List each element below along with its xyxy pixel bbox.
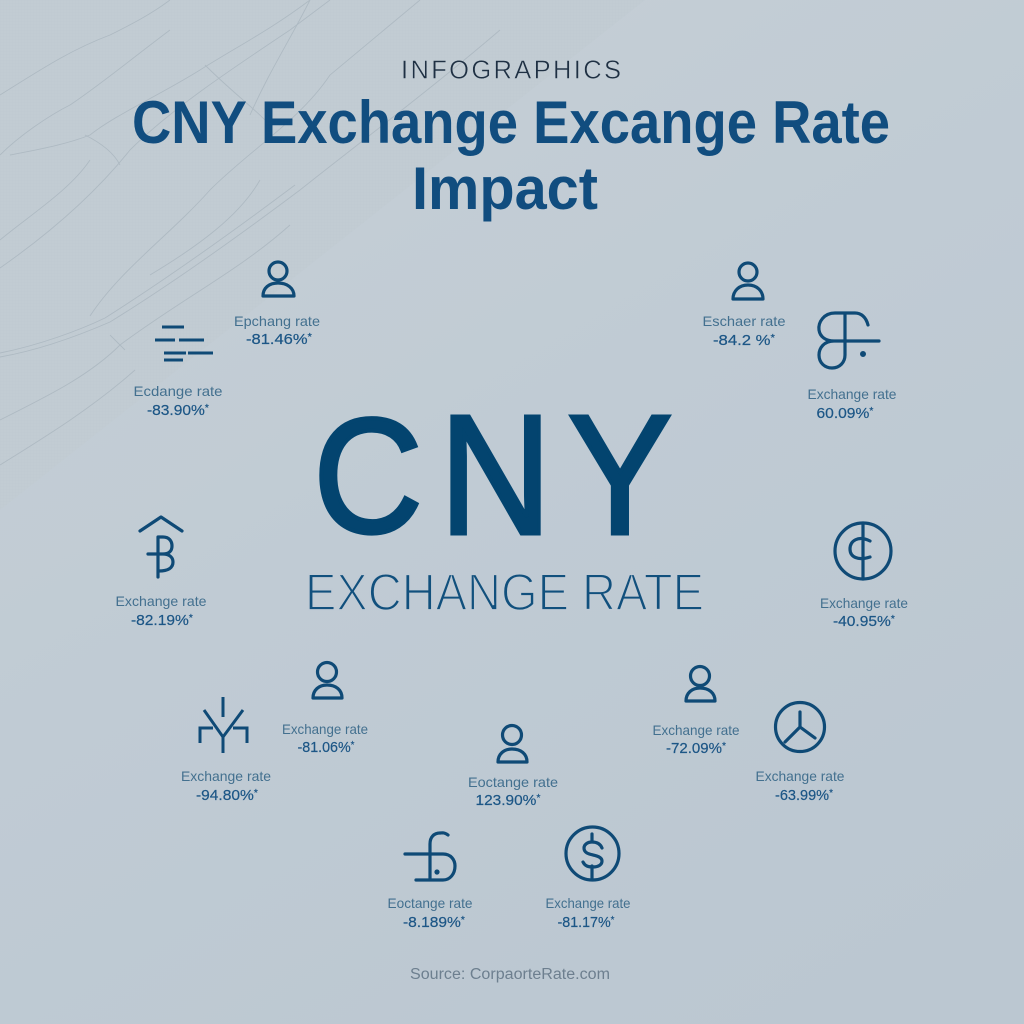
label: Eschaer rate xyxy=(702,313,786,329)
value: * xyxy=(254,788,258,799)
label: Ecdange rate xyxy=(134,383,223,399)
value: * xyxy=(891,614,895,625)
label: Exchange rate xyxy=(116,593,207,609)
value: * xyxy=(461,915,465,926)
value: 123.90% xyxy=(476,793,533,809)
label: Exchange rate xyxy=(181,768,271,784)
icon: cent coin xyxy=(835,523,891,579)
value: * xyxy=(869,406,874,417)
icon: caret and B glyph xyxy=(140,517,182,577)
item: bottom dollar coin xyxy=(546,827,631,931)
item: lower left person xyxy=(282,662,368,756)
icon: person xyxy=(733,263,763,299)
item: right cent coin xyxy=(820,523,908,630)
icon: looped currency glyph xyxy=(819,313,879,368)
value: -83.90% xyxy=(147,403,201,419)
item: bottom left script f xyxy=(388,833,473,931)
source line: Source: CorpaorteRate.com xyxy=(410,966,610,983)
value: -63.99% xyxy=(775,788,829,804)
item: top left person xyxy=(234,262,320,348)
label: Exchange rate xyxy=(756,768,845,784)
central CNY wordmark xyxy=(314,380,672,570)
icon: branching glyph xyxy=(200,697,247,753)
value: * xyxy=(189,613,193,624)
label: Exchange rate xyxy=(808,386,897,402)
item: top right person xyxy=(702,263,786,349)
eyebrow heading: INFOGRAPHICS xyxy=(401,56,621,84)
value: -82.19% xyxy=(131,613,185,629)
main title: CNY Exchange Excange Rate xyxy=(132,89,890,156)
textured diagonal corner panel xyxy=(0,0,500,466)
value: -81.17% xyxy=(558,915,612,931)
icon: person xyxy=(263,262,294,296)
item: bottom centre person xyxy=(468,726,558,809)
label: Eoctange rate xyxy=(388,895,473,911)
value: * xyxy=(308,332,312,343)
label: Exchange rate xyxy=(820,595,908,611)
central subtitle: EXCHANGE RATE xyxy=(305,564,704,622)
value: * xyxy=(205,403,209,414)
icon: three-spoke circle xyxy=(776,702,824,752)
value: * xyxy=(611,915,615,926)
item: lower right person xyxy=(652,666,740,757)
main title: Impact xyxy=(412,155,598,222)
value: -84.2 % xyxy=(713,333,763,349)
value: * xyxy=(536,793,541,804)
value: -94.80% xyxy=(196,788,250,804)
value: -40.95% xyxy=(833,614,887,630)
value: -8.189% xyxy=(403,915,457,931)
value: 60.09% xyxy=(816,406,866,422)
central CNY wordmark: N xyxy=(440,380,552,570)
item: lower right three-spoke circle xyxy=(756,702,845,804)
item: lower left branching glyph xyxy=(181,697,271,804)
value: * xyxy=(771,333,775,344)
value: * xyxy=(351,740,355,751)
icon: person xyxy=(498,726,527,762)
icon: person xyxy=(313,662,342,698)
value: * xyxy=(829,788,833,799)
value: -81.46% xyxy=(246,332,300,348)
label: Epchang rate xyxy=(234,313,320,329)
icon: stacked lines xyxy=(155,327,213,360)
item: right script glyph xyxy=(808,313,897,422)
item: left baht glyph xyxy=(116,517,207,629)
item: left horizontal lines xyxy=(134,327,223,419)
label: Exchange rate xyxy=(282,721,368,737)
value: -72.09% xyxy=(666,741,720,757)
icon: dollar coin xyxy=(566,827,619,880)
value: * xyxy=(722,741,726,752)
central CNY wordmark: C xyxy=(314,384,422,567)
icon: person xyxy=(686,666,715,701)
label: Exchange rate xyxy=(652,722,740,738)
central CNY wordmark: Y xyxy=(568,380,672,570)
icon: script f glyph xyxy=(405,833,455,880)
label: Eoctange rate xyxy=(468,774,558,790)
main title xyxy=(132,89,890,222)
label: Exchange rate xyxy=(546,895,631,911)
value: -81.06% xyxy=(298,740,352,756)
